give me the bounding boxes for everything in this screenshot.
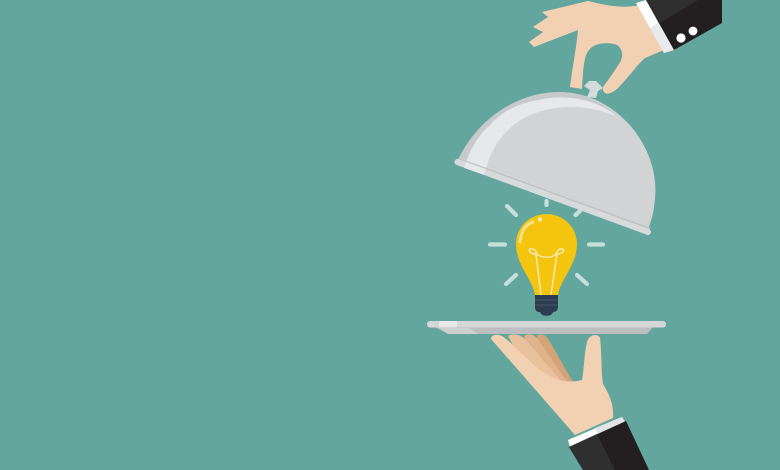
icon: cloche lid xyxy=(458,81,655,232)
icon: upper sleeve and cuff xyxy=(636,0,722,53)
icon: upper hand lifting the lid xyxy=(529,1,664,94)
icon: serving tray xyxy=(427,321,666,334)
icon: light rays xyxy=(490,201,603,284)
icon: light bulb xyxy=(516,214,577,316)
icon: lower sleeve and cuff xyxy=(568,417,649,470)
filament xyxy=(529,249,564,295)
icon: lower hand holding the tray xyxy=(491,334,613,435)
